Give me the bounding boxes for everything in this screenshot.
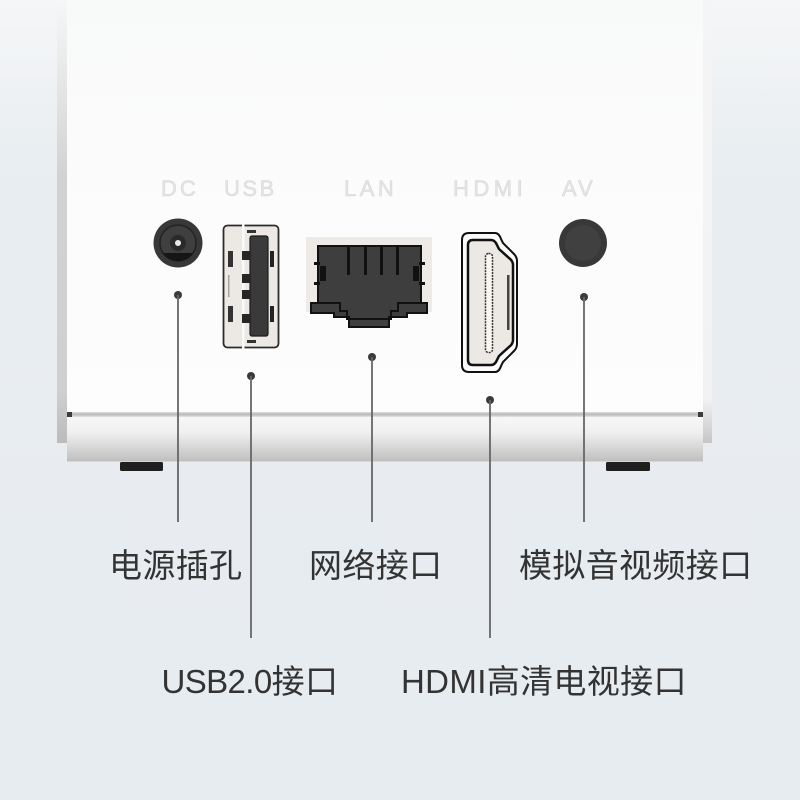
text: network port: 网络接口: [309, 547, 442, 584]
icon: AV jack: [559, 219, 607, 267]
device body: [57, 0, 712, 462]
text: HDMI port: HDMI高清电视接口: [401, 663, 687, 700]
icon: LAN port: [306, 237, 432, 327]
label: LAN: LAN: [344, 176, 397, 201]
icon: left foot: [120, 462, 163, 471]
leader: USB: [247, 372, 255, 638]
leader: HDMI: [486, 396, 494, 638]
leader: LAN: [368, 353, 376, 522]
label: AV: AV: [562, 176, 596, 201]
leader: AV: [580, 293, 588, 522]
icon: HDMI port: [462, 233, 517, 372]
text: USB2.0 port: USB2.0接口: [162, 663, 338, 700]
label: USB: USB: [224, 176, 277, 201]
leader: DC: [174, 291, 182, 522]
text: power jack: 电源插孔: [109, 547, 242, 584]
icon: USB port: [224, 223, 278, 350]
text: analog AV port: 模拟音视频接口: [519, 547, 752, 584]
label: DC: DC: [161, 176, 199, 201]
icon: DC power jack: [154, 218, 202, 268]
icon: right foot: [606, 462, 650, 471]
label: HDMI: HDMI: [453, 176, 527, 201]
